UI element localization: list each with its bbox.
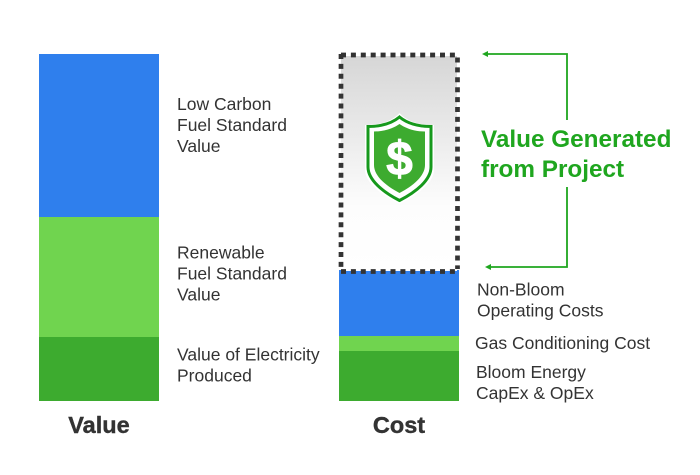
cost bar labels: CapEx & OpEx [476, 383, 594, 403]
cost bar labels: Non-Bloom [477, 280, 565, 300]
heading: value generated from project: Value Generated [481, 126, 671, 153]
dashed value generated box [341, 54, 458, 272]
value bar labels: Produced [177, 366, 252, 386]
cost bar labels: Operating Costs [477, 300, 604, 320]
icon: shield with dollar sign [365, 113, 434, 204]
value bar labels: Low Carbon [177, 94, 271, 114]
value bar labels: Fuel Standard [177, 115, 287, 135]
heading: value generated from project [481, 126, 671, 183]
cost axis label: Cost [373, 412, 425, 438]
value bar labels: Renewable [177, 242, 265, 262]
value bar labels: Value [177, 284, 220, 304]
arrow: bottom [485, 187, 567, 270]
value bar labels: Value [177, 136, 220, 156]
heading: value generated from project: from Project [481, 156, 624, 183]
value bar labels: Value of Electricity [177, 344, 320, 364]
arrow: top [482, 51, 567, 120]
cost bar labels: Gas Conditioning Cost [475, 333, 650, 353]
value bar labels [177, 94, 320, 386]
cost stacked bar [339, 270, 459, 401]
icon: shield with dollar sign: $ [386, 133, 413, 186]
cost bar labels [475, 280, 650, 403]
value axis label: Value [68, 412, 130, 438]
value bar labels: Fuel Standard [177, 264, 287, 284]
cost bar labels: Bloom Energy [476, 362, 586, 382]
value stacked bar [39, 54, 159, 401]
